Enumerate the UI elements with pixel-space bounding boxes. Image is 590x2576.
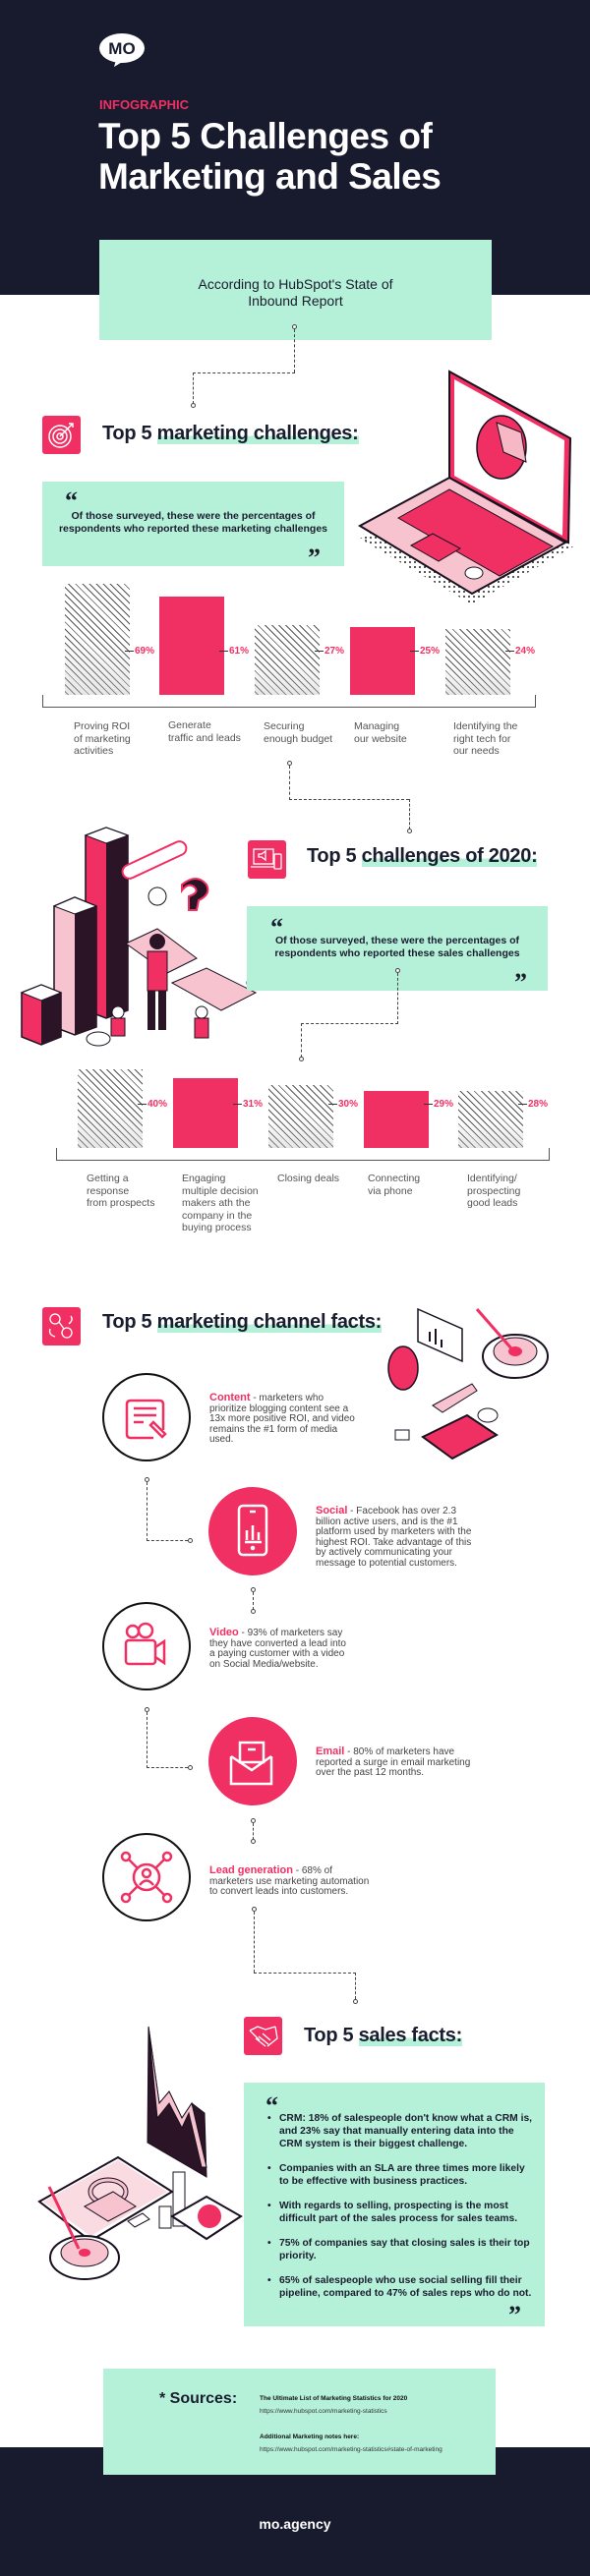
bar chart: sales challenges: 40% <box>148 1099 167 1110</box>
sources box: Additional Marketing notes here: <box>260 2433 359 2440</box>
illustration: chart, target, magnifier <box>37 2027 243 2280</box>
sales facts list: • <box>267 2238 271 2249</box>
connector 7 <box>251 1818 256 1844</box>
connector 8 <box>252 1907 358 2004</box>
sources box: https://www.hubspot.com/marketing-statistics <box>260 2408 387 2415</box>
sources box: * Sources: <box>159 2390 237 2407</box>
bar chart: marketing challenges: Securing <box>264 720 304 732</box>
sales facts list: CRM: 18% of salespeople don't know what a CRM is, and 23% say that manually entering data into the CRM system is their biggest challenge. <box>279 2113 532 2149</box>
icon: lead network <box>102 1833 191 1921</box>
icon: megaphone screen <box>248 840 286 879</box>
bar chart: sales challenges: 30% <box>338 1099 358 1110</box>
quote box: sales facts <box>244 2083 545 2326</box>
bar chart: sales challenges: Engaging <box>182 1173 225 1184</box>
sales facts list: • <box>267 2113 271 2124</box>
quote box: marketing: Of those surveyed, these were the percentages of <box>71 510 315 522</box>
bar chart: sales challenges: company in the <box>182 1209 252 1221</box>
icon: network <box>42 1307 81 1345</box>
bar chart: sales challenges: 29% <box>434 1099 453 1110</box>
bar chart: marketing challenges: 24% <box>515 646 535 657</box>
text: social: Social - Facebook has over 2.3 billion active users, and is the #1 platform used by marketers with the highest ROI. Take advantage of this by actively communicating your message to potential customers. <box>316 1505 471 1569</box>
footer: mo.agency: mo.agency <box>259 2516 331 2532</box>
bar chart: marketing challenges: right tech for <box>453 733 510 745</box>
illustration: social icons <box>387 1307 549 1460</box>
fact: email <box>208 1717 470 1805</box>
quote box: sales: “ <box>270 913 283 942</box>
sources box <box>103 2369 496 2475</box>
sales facts list: 65% of salespeople who use social selling fill their pipeline, compared to 47% of sales reps who do not. <box>279 2275 531 2299</box>
intro box: According to HubSpot's State of <box>198 276 393 292</box>
text: email: Email - 80% of marketers have reported a surge in email marketing over the past 12 months. <box>316 1746 470 1778</box>
quote box: sales facts: ” <box>508 2301 521 2329</box>
quote box: marketing: ” <box>308 544 321 572</box>
intro box <box>99 240 492 340</box>
bar chart: marketing challenges: our needs <box>453 745 500 757</box>
bar chart: marketing challenges: Generate <box>168 719 211 731</box>
quote box: marketing: “ <box>65 487 78 515</box>
illustration: laptop <box>358 370 573 602</box>
connector 4 <box>145 1477 193 1543</box>
icon: content document <box>102 1373 191 1461</box>
bar chart: sales challenges: via phone <box>368 1185 413 1197</box>
quote box: sales <box>247 906 548 991</box>
sales facts list: • <box>267 2275 271 2286</box>
connector 2 <box>287 761 412 833</box>
bar chart: marketing challenges: 25% <box>420 646 440 657</box>
sales facts list: • <box>267 2201 271 2211</box>
bar chart: marketing challenges: enough budget <box>264 733 332 745</box>
text: lead generation: Lead generation - 68% of marketers use marketing automation to convert leads into customers. <box>209 1864 369 1897</box>
bar chart: sales challenges: good leads <box>467 1197 517 1209</box>
bar chart: sales challenges: 28% <box>528 1099 548 1110</box>
sales facts list: 75% of companies say that closing sales is their top priority. <box>279 2238 530 2261</box>
bar chart: sales challenges: 31% <box>243 1099 263 1110</box>
connector 5 <box>251 1587 256 1614</box>
quote box: marketing <box>42 482 344 566</box>
icon: phone chart <box>208 1487 297 1575</box>
quote box: sales facts: “ <box>266 2091 278 2120</box>
icon: envelope <box>208 1717 297 1805</box>
text: content: Content - marketers who prioritize blogging content see a 13x more positive ROI, and video remains the #1 form of media used. <box>209 1392 355 1445</box>
heading: marketing channel facts: Top 5 marketing channel facts: <box>102 1311 382 1333</box>
bar chart: marketing challenges <box>42 584 536 757</box>
bar chart: marketing challenges: Managing <box>354 720 399 732</box>
bar chart: sales challenges: from prospects <box>87 1197 154 1209</box>
bar chart: marketing challenges: 61% <box>229 646 249 657</box>
quote box: sales: ” <box>514 968 527 997</box>
bar chart: marketing challenges: Identifying the <box>453 720 517 732</box>
bar chart: marketing challenges: activities <box>74 745 113 757</box>
connector 3 <box>299 968 400 1061</box>
logo: MO <box>108 39 136 58</box>
text: video: Video - 93% of marketers say they have converted a lead into a paying customer with a video on Social Media/website. <box>209 1627 346 1670</box>
bar chart: marketing challenges: of marketing <box>74 733 131 745</box>
bar chart: sales challenges: buying process <box>182 1222 252 1233</box>
illustration: bars and person <box>20 827 257 1046</box>
bar chart: sales challenges: Getting a <box>87 1173 129 1184</box>
title <box>98 116 441 197</box>
intro box: Inbound Report <box>248 293 343 309</box>
fact: social <box>208 1487 471 1575</box>
bar chart: marketing challenges: 69% <box>135 646 154 657</box>
sales facts list: Companies with an SLA are three times more likely to be effective with business practices. <box>279 2163 525 2187</box>
sales facts list: With regards to selling, prospecting is the most difficult part of the sales process for sales teams. <box>279 2201 517 2224</box>
icon: video camera <box>102 1602 191 1690</box>
kicker: INFOGRAPHIC: INFOGRAPHIC <box>99 97 189 112</box>
bar chart: sales challenges: Closing deals <box>277 1173 339 1184</box>
bar chart: marketing challenges: Proving ROI <box>74 720 130 732</box>
bar chart: marketing challenges: traffic and leads <box>168 731 241 743</box>
connector 1 <box>191 324 297 408</box>
sources box: https://www.hubspot.com/marketing-statistics#state-of-marketing <box>260 2446 442 2453</box>
bar chart: sales challenges <box>56 1069 550 1233</box>
sales facts list: • <box>267 2163 271 2174</box>
bar chart: sales challenges: Identifying/ <box>467 1173 517 1184</box>
bar chart: sales challenges: makers ath the <box>182 1197 250 1209</box>
logo <box>99 33 145 67</box>
icon: handshake <box>244 2017 282 2055</box>
title: Top 5 Challenges of <box>98 116 432 156</box>
icon: target <box>42 416 81 454</box>
heading: marketing challenges: Top 5 marketing challenges: <box>102 423 358 444</box>
quote box: marketing: respondents who reported these marketing challenges <box>59 523 327 535</box>
sources box: The Ultimate List of Marketing Statistics for 2020 <box>260 2395 407 2402</box>
header background <box>0 0 590 295</box>
bar chart: sales challenges: response <box>87 1185 129 1197</box>
connector 6 <box>145 1707 193 1770</box>
sales facts list <box>267 2113 532 2299</box>
bar chart: sales challenges: Connecting <box>368 1173 420 1184</box>
fact: content <box>102 1373 355 1461</box>
quote box: sales: Of those surveyed, these were the percentages of <box>275 935 519 946</box>
fact: lead generation <box>102 1833 369 1921</box>
bar chart: sales challenges: multiple decision <box>182 1185 259 1197</box>
title: Marketing and Sales <box>98 156 441 197</box>
fact: video <box>102 1602 346 1690</box>
heading: challenges of 2020: Top 5 challenges of 2020: <box>307 845 537 867</box>
bar chart: marketing challenges: our website <box>354 733 407 745</box>
footer background <box>0 2447 590 2576</box>
heading: sales facts: Top 5 sales facts: <box>304 2025 462 2046</box>
bar chart: marketing challenges: 27% <box>324 646 344 657</box>
bar chart: sales challenges: prospecting <box>467 1185 520 1197</box>
quote box: sales: respondents who reported these sales challenges <box>274 947 520 959</box>
